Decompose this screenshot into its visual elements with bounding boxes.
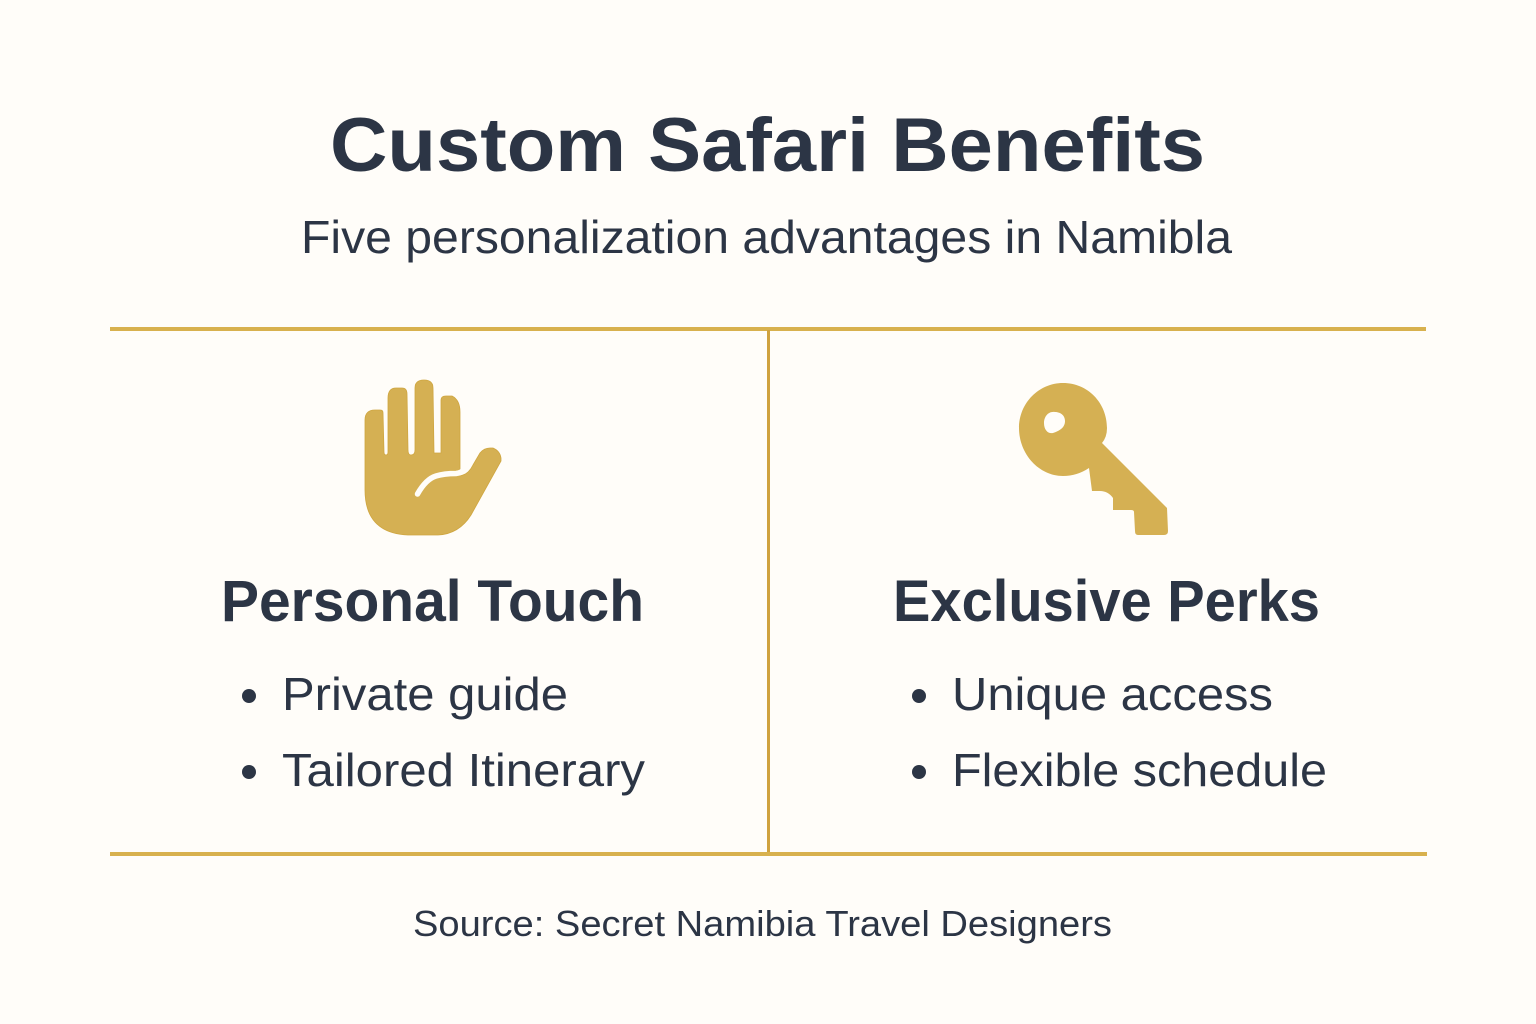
title: Custom Safari Benefits [330, 103, 1205, 188]
list item: unique access: Unique access [952, 668, 1273, 720]
frame: centre divider [767, 330, 770, 853]
frame: top rule [110, 327, 1426, 331]
icon: key [1019, 383, 1168, 535]
frame: bottom rule [110, 852, 1427, 856]
panel: personal touch [221, 380, 645, 796]
list item: tailored itinerary: Tailored Itinerary [282, 744, 645, 796]
icon detail: palm crease [418, 469, 464, 494]
subtitle: Five personalization advantages in Namibla [301, 211, 1232, 263]
heading: personal touch: Personal Touch [221, 569, 644, 634]
source note: Source: Secret Namibia Travel Designers [413, 903, 1112, 944]
list item: private guide: Private guide [282, 668, 568, 720]
panel: exclusive perks [893, 383, 1327, 796]
icon: raised hand [365, 380, 501, 535]
list item: flexible schedule: Flexible schedule [952, 744, 1327, 796]
heading: exclusive perks: Exclusive Perks [893, 569, 1320, 634]
